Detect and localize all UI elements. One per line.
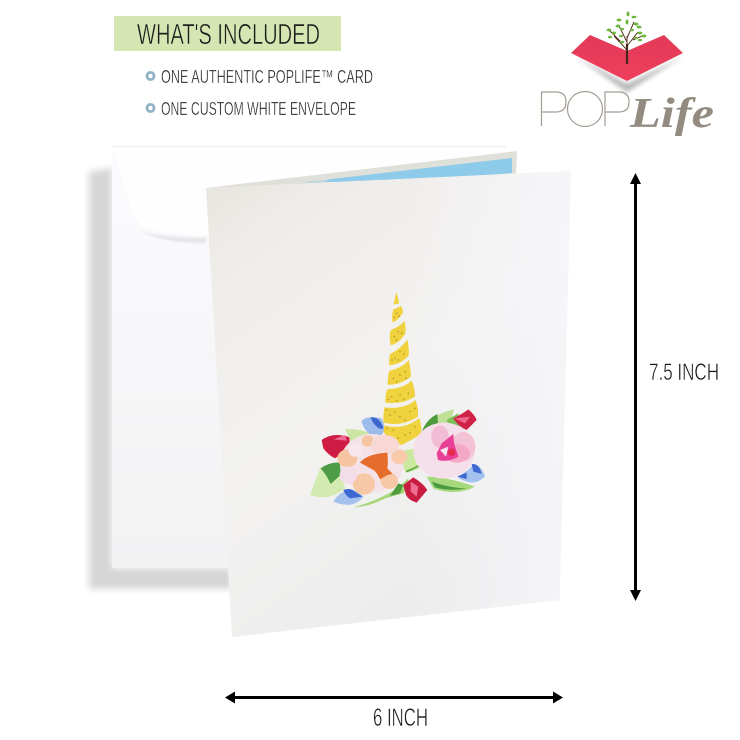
bullet item: envelope — [147, 98, 356, 119]
blue inner panel — [306, 158, 512, 182]
logo: PopLife — [542, 12, 714, 137]
arrow: width dimension — [225, 692, 563, 704]
icon: tree — [606, 12, 646, 64]
red buds — [322, 409, 477, 503]
flap shadow — [142, 232, 206, 243]
envelope shadow — [89, 168, 232, 589]
leaves — [310, 409, 475, 507]
wordmark Life: Life — [629, 91, 714, 137]
heading: what's included — [114, 16, 341, 51]
bullet item: card: ONE AUTHENTIC POPLIFE™ CARD — [161, 66, 373, 87]
blue buds — [333, 417, 485, 505]
icon: open red book — [571, 35, 683, 81]
list: included items — [147, 66, 373, 119]
floral wreath — [310, 409, 485, 507]
card front — [206, 171, 571, 637]
arrow: height dimension — [630, 173, 641, 601]
horn — [383, 292, 421, 445]
card inside page — [206, 151, 517, 188]
envelope flap — [113, 147, 506, 236]
horn glitter — [386, 312, 416, 439]
logo shadow — [575, 56, 684, 92]
heading: what's included: WHAT'S INCLUDED — [137, 19, 320, 51]
envelope body — [112, 146, 412, 568]
envelope top edge — [112, 146, 507, 147]
wordmark POP — [542, 92, 629, 126]
unicorn horn and flowers — [310, 292, 485, 507]
inside back panel — [206, 151, 517, 188]
label: 6 INCH: 6 INCH — [373, 704, 428, 732]
envelope with shadow — [89, 146, 507, 589]
bullet item: envelope: ONE CUSTOM WHITE ENVELOPE — [161, 98, 356, 119]
bullet item: card — [147, 66, 373, 87]
peach peony — [337, 434, 407, 495]
pink peony — [413, 423, 475, 479]
